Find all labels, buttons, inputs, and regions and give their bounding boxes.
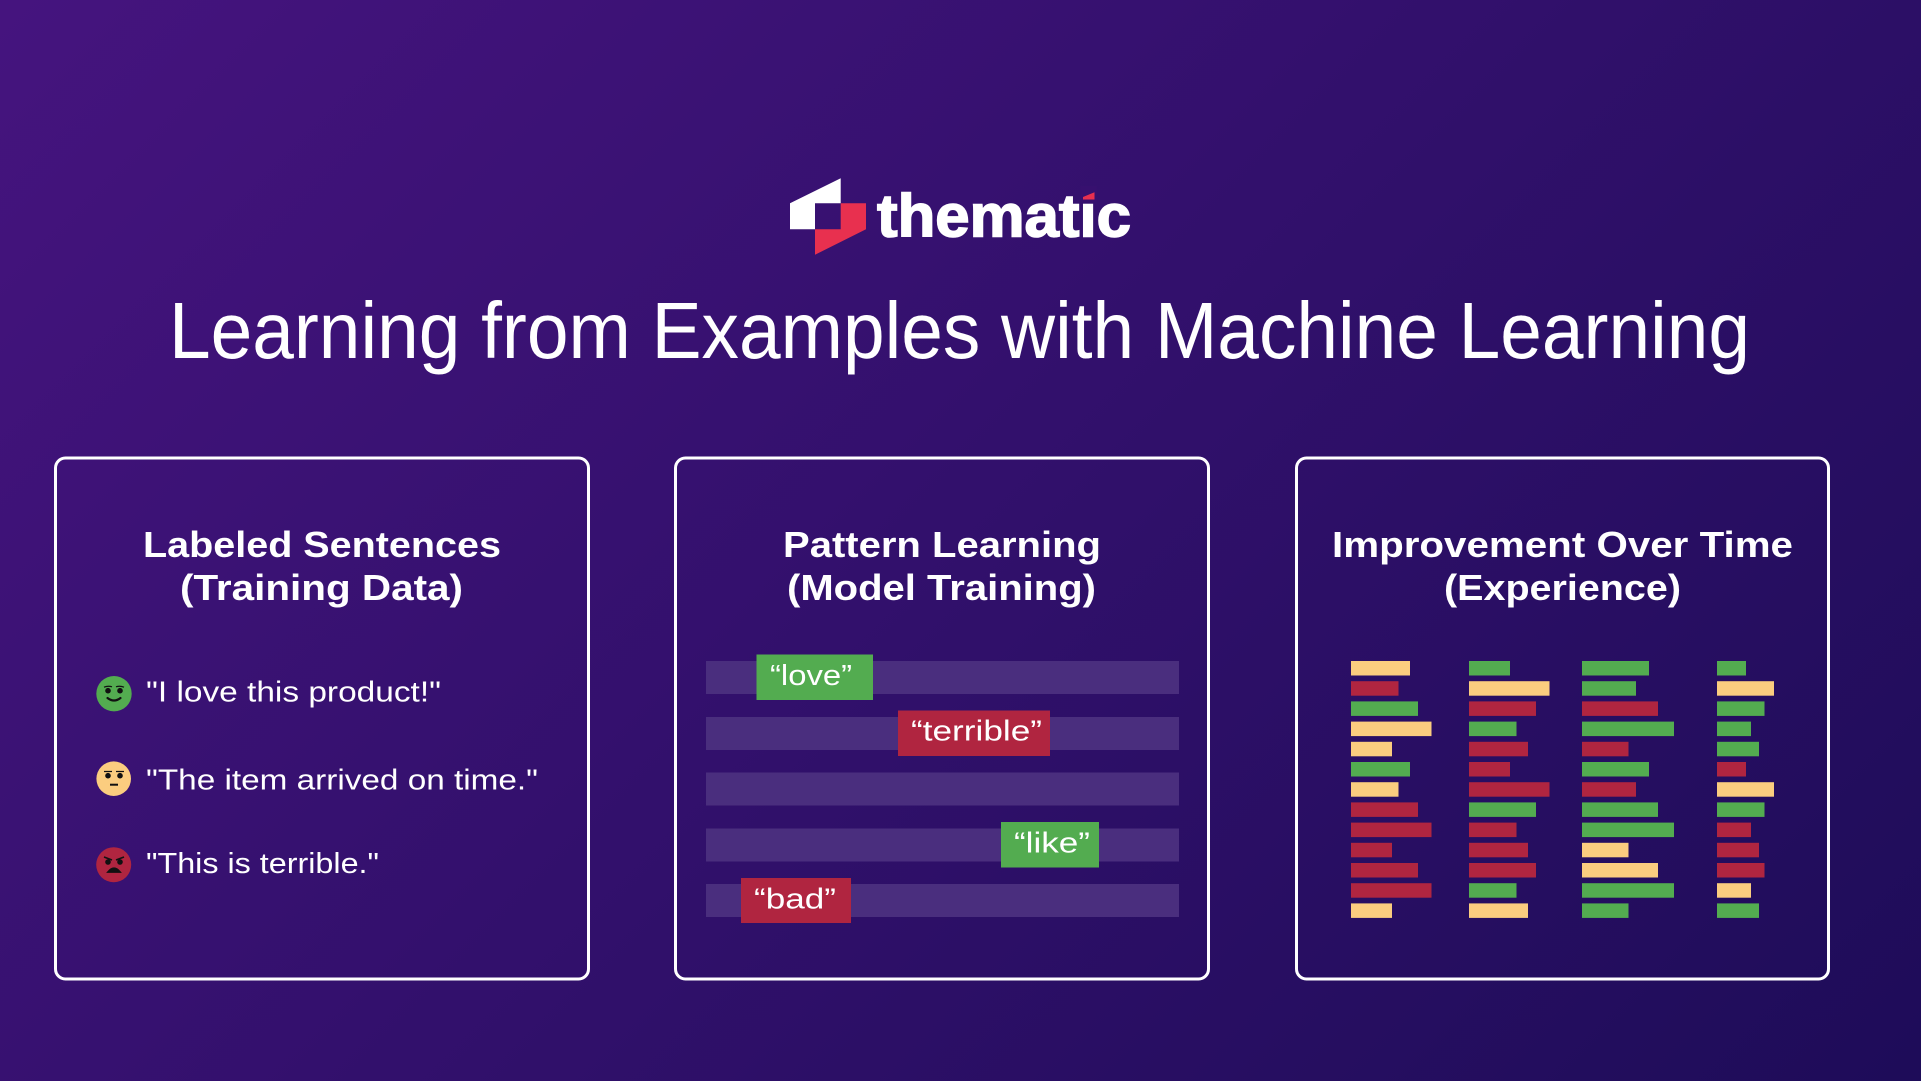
tag: bad	[741, 878, 851, 923]
tag: like	[1001, 822, 1099, 868]
sentence: neutral: "The item arrived on time."	[146, 764, 538, 796]
heading: pattern learning: Pattern Learning	[783, 524, 1101, 565]
icon: angry face	[96, 847, 131, 882]
bar column 4	[1717, 661, 1774, 918]
heading: improvement over time: (Experience)	[1444, 567, 1681, 608]
heading: improvement over time: Improvement Over Time	[1332, 524, 1793, 565]
panel: improvement over time	[1296, 458, 1828, 979]
panel: pattern learning	[676, 458, 1208, 979]
bar column 1	[1351, 661, 1432, 918]
heading: pattern learning	[783, 524, 1101, 608]
heading: pattern learning: (Model Training)	[787, 567, 1096, 608]
heading: labeled sentences: (Training Data)	[180, 567, 463, 608]
logo wordmark: thematic	[877, 182, 1131, 250]
panel: labeled sentences	[56, 458, 588, 979]
heading: labeled sentences: Labeled Sentences	[143, 524, 501, 565]
heading: labeled sentences	[143, 524, 501, 608]
tag: like: “like”	[1014, 828, 1090, 860]
tag: bad: “bad”	[754, 884, 836, 916]
title: Learning from Examples with Machine Learning	[169, 286, 1750, 375]
bar column 3	[1582, 661, 1674, 918]
tag: love	[756, 654, 873, 700]
heading: improvement over time	[1332, 524, 1793, 608]
icon: neutral face	[96, 761, 131, 796]
sentence strips	[706, 661, 1179, 917]
icon: logo mark	[790, 178, 866, 255]
bar column 2	[1469, 661, 1550, 918]
tag: terrible	[898, 710, 1050, 756]
sentence: negative: "This is terrible."	[146, 848, 379, 880]
logo: thematic	[790, 178, 1131, 255]
tag: terrible: “terrible”	[911, 716, 1042, 748]
tag: love: “love”	[770, 660, 852, 692]
sentence: positive: "I love this product!"	[146, 676, 441, 708]
icon: happy face	[96, 676, 132, 711]
